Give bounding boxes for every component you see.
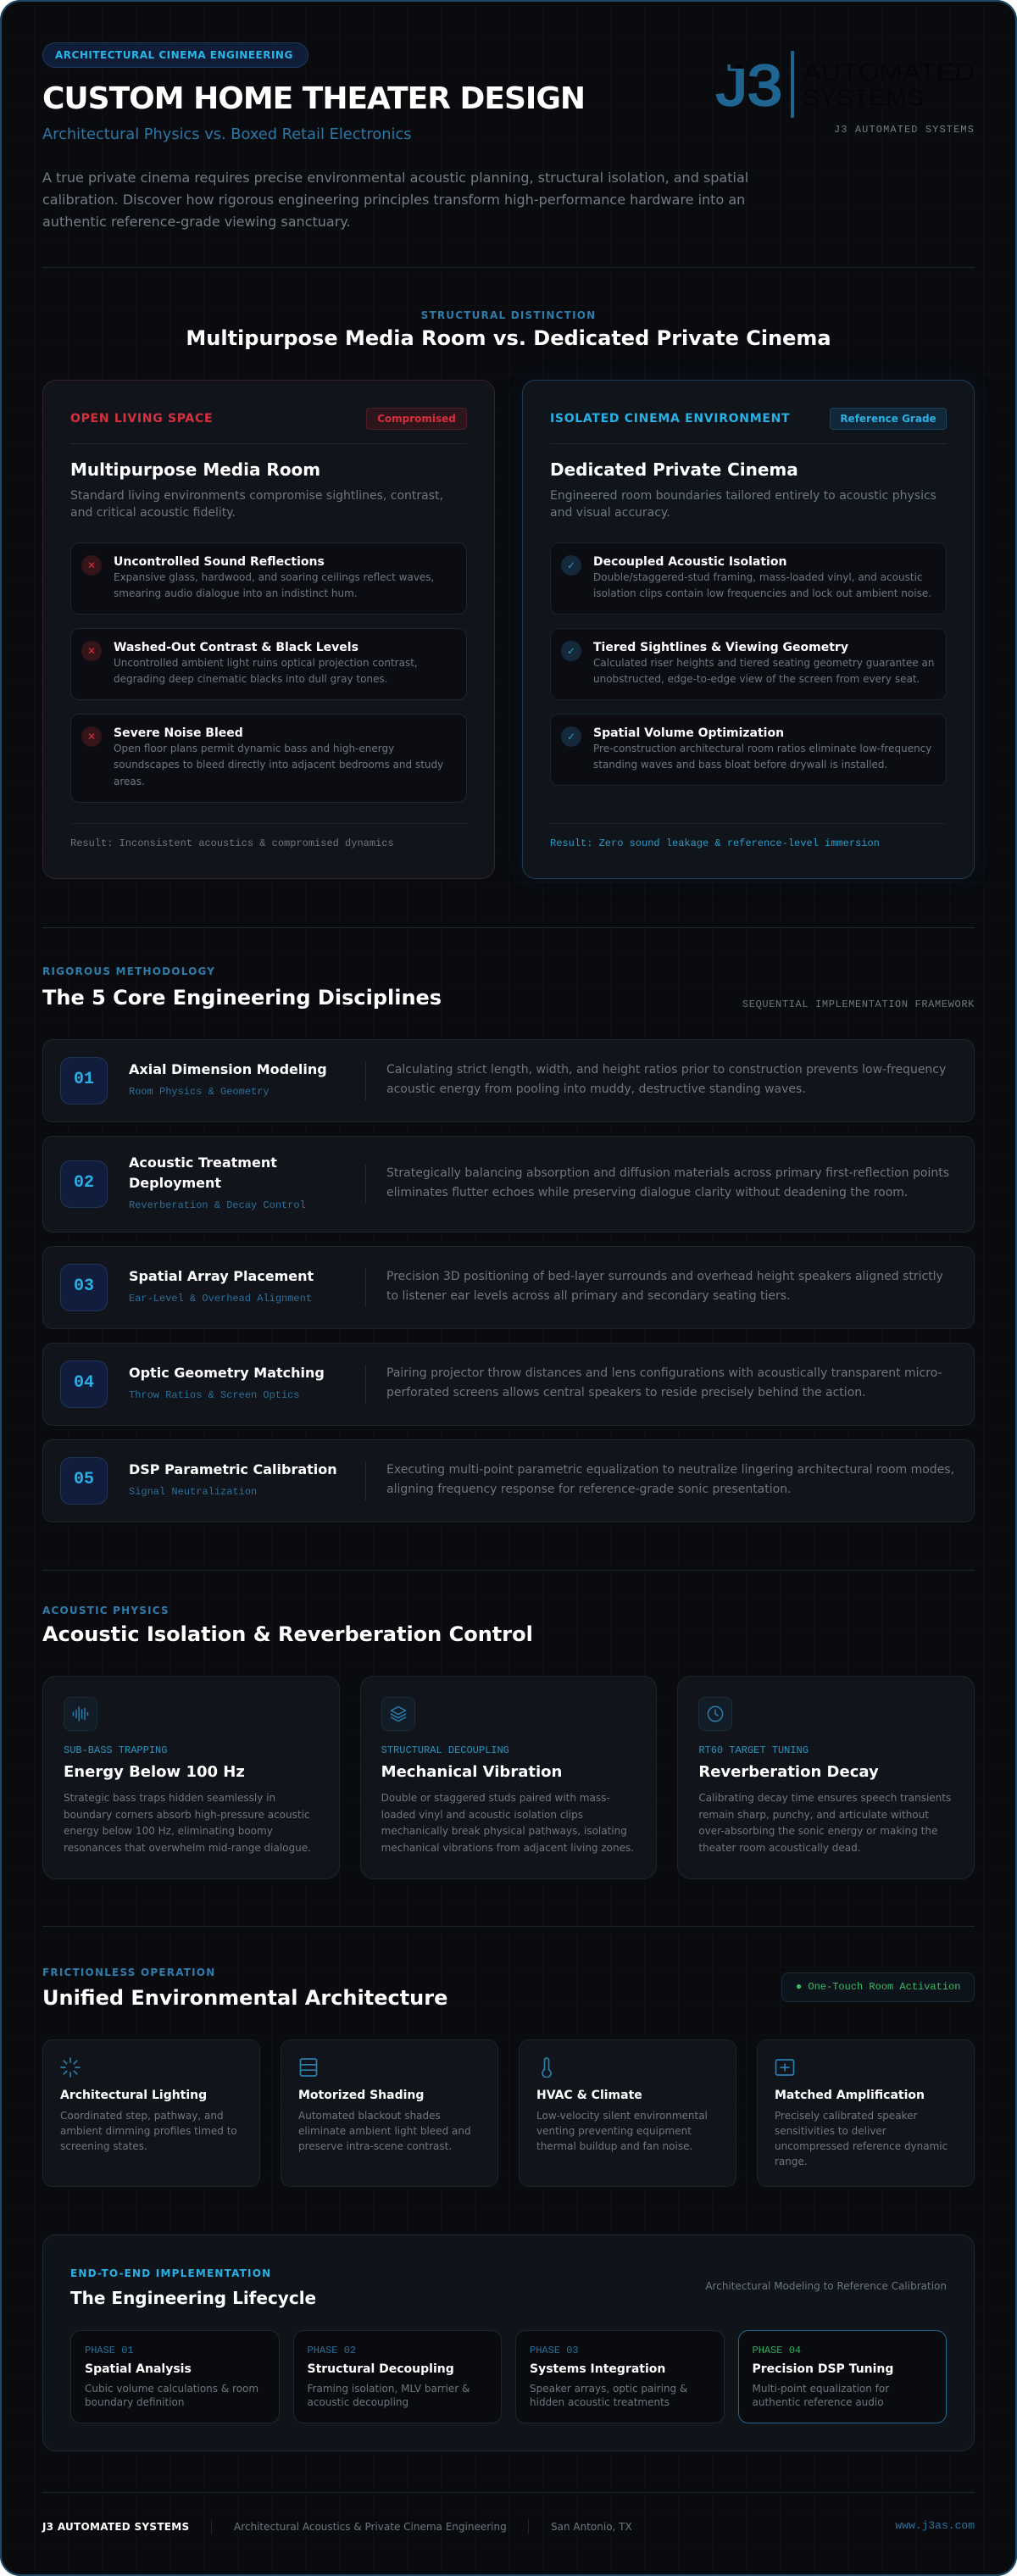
card: structural decoupling: mechanically break physical pathways, isolating: [381, 1825, 627, 1837]
eyebrow: frictionless operation: FRICTIONLESS OPERATION: [42, 1967, 215, 1978]
icon: check: [561, 641, 581, 661]
phase 03: Systems Integration: [530, 2362, 665, 2376]
number 03: 03: [74, 1277, 94, 1296]
icon: cross: [81, 641, 102, 661]
panel note: Architectural Modeling to Reference Calibration: [705, 2280, 947, 2292]
icon: check: ✓: [567, 731, 575, 743]
footer descriptor: Architectural Acoustics & Private Cinema Engineering: [234, 2521, 507, 2533]
footer location: San Antonio, TX: [551, 2521, 632, 2533]
row: discipline 02: Strategically balancing absorption and diffusion materials across primary first-reflection points: [386, 1166, 949, 1180]
row: discipline 02: eliminates flutter echoes while preserving dialogue clarity without deadening the room.: [386, 1185, 908, 1199]
card: sub-bass trapping: SUB-BASS TRAPPING: [64, 1744, 167, 1756]
logo: J3 Automated Systems: AUTOMATED: [803, 59, 975, 86]
logo caption: J3 AUTOMATED SYSTEMS: [834, 124, 975, 136]
number 01: 01: [74, 1070, 94, 1089]
eyebrow: acoustic physics: ACOUSTIC PHYSICS: [42, 1605, 170, 1616]
card: sub-bass trapping: Energy Below 100 Hz: [64, 1763, 245, 1781]
phase 02: acoustic decoupling: [307, 2396, 408, 2408]
panel: open living space: [42, 380, 495, 879]
item: washed-out contrast: Uncontrolled ambient light ruins optical projection contrast,: [114, 657, 418, 669]
row: discipline 03: Spatial Array Placement: [129, 1268, 314, 1284]
phase 01: boundary definition: [85, 2396, 184, 2408]
card: structural decoupling: mechanical vibrations from adjacent living zones.: [381, 1841, 634, 1853]
card: sub-bass trapping: resonances that overwhelm mid-range dialogue.: [64, 1841, 311, 1853]
row: discipline 03: to listener ear levels across all primary and secondary seating tiers.: [386, 1288, 791, 1302]
card: sub-bass trapping: energy below 100 Hz, eliminating boomy: [64, 1825, 273, 1837]
intro text: authentic reference-grade viewing sanctuary.: [42, 214, 351, 230]
item: washed-out contrast: [70, 628, 467, 700]
item: decoupled acoustic isolation: isolation clips contain low frequencies and lock out ambient noise.: [593, 587, 931, 599]
panel label: ISOLATED CINEMA ENVIRONMENT: [550, 412, 790, 426]
title: CUSTOM HOME THEATER DESIGN: [42, 81, 585, 116]
icon: layers: [381, 1697, 415, 1731]
row: discipline 01: Room Physics & Geometry: [129, 1086, 270, 1098]
heading: unified environmental architecture: Unified Environmental Architecture: [42, 1986, 447, 2010]
phase 01: Spatial Analysis: [85, 2362, 192, 2376]
item: spatial volume optimization: Spatial Volume Optimization: [593, 726, 784, 739]
icon: check: [561, 555, 581, 576]
intro text: [42, 170, 748, 230]
row: discipline 05: [42, 1439, 975, 1522]
item: tiered sightlines: [550, 628, 947, 700]
row: discipline 03: [42, 1246, 975, 1329]
number 02: 02: [74, 1173, 94, 1193]
number 05: 05: [74, 1470, 94, 1489]
intro text: A true private cinema requires precise environmental acoustic planning, structural isolation, and spatial: [42, 170, 748, 186]
row: discipline 01: [42, 1039, 975, 1122]
phase 02: PHASE 02: [307, 2345, 356, 2356]
card: matched amplification: Matched Amplification: [775, 2089, 925, 2102]
row: discipline 01: Calculating strict length, width, and height ratios prior to construction prevents low-frequency: [386, 1063, 946, 1077]
phase 04: Multi-point equalization for: [753, 2383, 889, 2395]
row: discipline 02: [42, 1136, 975, 1232]
panel: engineering lifecycle: [42, 2234, 975, 2451]
icon: cross: ✕: [87, 731, 96, 743]
row: discipline 04: Throw Ratios & Screen Optics: [129, 1389, 300, 1401]
phase 02: Framing isolation, MLV barrier &: [307, 2383, 470, 2395]
item: uncontrolled sound reflections: Expansive glass, hardwood, and soaring ceilings reflect waves,: [114, 571, 434, 583]
status chip: reference grade: Reference Grade: [840, 413, 936, 425]
item: uncontrolled sound reflections: Uncontrolled Sound Reflections: [114, 554, 325, 568]
icon: thermometer: [542, 2057, 552, 2078]
phase 04: PHASE 04: [753, 2345, 801, 2356]
logo: J3 Automated Systems: J3: [716, 53, 782, 118]
card: motorized shading: [281, 2039, 498, 2187]
card: matched amplification: Precisely calibrated speaker: [775, 2110, 917, 2122]
heading: 5 core disciplines: The 5 Core Engineering Disciplines: [42, 986, 442, 1010]
card: architectural lighting: Coordinated step, pathway, and: [60, 2110, 224, 2122]
result line: Result: Inconsistent acoustics & compromised dynamics: [70, 837, 394, 849]
item: severe noise bleed: [70, 714, 467, 803]
row: discipline 05: aligning frequency response for reference-grade sonic presentation.: [386, 1482, 792, 1495]
card: matched amplification: [757, 2039, 975, 2187]
card: motorized shading: preserve intra-scene contrast.: [298, 2140, 452, 2152]
card: motorized shading: Automated blackout shades: [298, 2110, 441, 2122]
panel description: [550, 489, 936, 520]
logo: J3 Automated Systems: SYSTEMS: [803, 85, 924, 110]
number 03: [60, 1264, 108, 1311]
phase 04: Precision DSP Tuning: [753, 2362, 893, 2376]
row: discipline 04: perforated screens allows central speakers to reside precisely behind the action.: [386, 1385, 866, 1399]
row: discipline 01: Axial Dimension Modeling: [129, 1061, 327, 1077]
row: discipline 05: Signal Neutralization: [129, 1486, 257, 1498]
card: structural decoupling: STRUCTURAL DECOUPLING: [381, 1744, 509, 1756]
phase 02: [293, 2330, 502, 2423]
card: hvac & climate: thermal buildup and fan noise.: [536, 2140, 692, 2152]
phase 03: Speaker arrays, optic pairing &: [530, 2383, 687, 2395]
row: discipline 03: Ear-Level & Overhead Alignment: [129, 1293, 312, 1305]
card: architectural lighting: [42, 2039, 260, 2187]
item: severe noise bleed: Open floor plans permit dynamic bass and high-energy: [114, 743, 394, 754]
card: hvac & climate: venting preventing equipment: [536, 2125, 692, 2137]
heading: acoustic isolation: Acoustic Isolation & Reverberation Control: [42, 1622, 533, 1646]
section heading: structural distinction: STRUCTURAL DISTINCTION: [421, 309, 596, 321]
panel heading: Dedicated Private Cinema: [550, 459, 798, 480]
row: discipline 03: Precision 3D positioning of bed-layer surrounds and overhead height speakers aligned strictly: [386, 1270, 943, 1283]
status chip: compromised: Compromised: [377, 413, 456, 425]
item: uncontrolled sound reflections: [70, 542, 467, 615]
card: architectural lighting: ambient dimming profiles timed to: [60, 2125, 237, 2137]
phase 03: PHASE 03: [530, 2345, 579, 2356]
card: structural decoupling: loaded vinyl and acoustic isolation clips: [381, 1809, 583, 1821]
item: severe noise bleed: Severe Noise Bleed: [114, 726, 243, 739]
card: rt60 target tuning: theater room acoustically dead.: [698, 1841, 861, 1853]
card: sub-bass trapping: [42, 1676, 340, 1879]
item: tiered sightlines: Calculated riser heights and tiered seating geometry guarantee an: [593, 657, 934, 669]
card: rt60 target tuning: over-absorbing the sonic energy or making the: [698, 1825, 937, 1837]
panel label: OPEN LIVING SPACE: [70, 412, 213, 426]
card: sub-bass trapping: Strategic bass traps hidden seamlessly in: [64, 1792, 275, 1804]
panel heading: The Engineering Lifecycle: [70, 2288, 316, 2308]
subtitle: Architectural Physics vs. Boxed Retail Electronics: [42, 125, 412, 143]
card: hvac & climate: [519, 2039, 736, 2187]
item: severe noise bleed: areas.: [114, 776, 145, 787]
panel heading: Multipurpose Media Room: [70, 459, 320, 480]
item: severe noise bleed: soundscapes to bleed directly into adjacent bedrooms and study: [114, 759, 443, 771]
card: structural decoupling: Mechanical Vibration: [381, 1763, 562, 1781]
icon: check: ✓: [567, 559, 575, 571]
card: motorized shading: eliminate ambient light bleed and: [298, 2125, 471, 2137]
card: rt60 target tuning: [677, 1676, 975, 1879]
result line: Result: Zero sound leakage & reference-level immersion: [550, 837, 880, 849]
footer brand: J3 AUTOMATED SYSTEMS: [42, 2521, 189, 2533]
number 04: [60, 1360, 108, 1408]
panel: isolated cinema environment: [522, 380, 975, 879]
row: discipline 02: Deployment: [129, 1175, 221, 1191]
eyebrow: END-TO-END IMPLEMENTATION: [70, 2267, 271, 2279]
card: rt60 target tuning: Calibrating decay time ensures speech transients: [698, 1792, 951, 1804]
item: decoupled acoustic isolation: Decoupled Acoustic Isolation: [593, 554, 786, 568]
row: discipline 02: Reverberation & Decay Control: [129, 1199, 306, 1211]
card: matched amplification: range.: [775, 2156, 808, 2167]
section heading: structural distinction: Multipurpose Media Room vs. Dedicated Private Cinema: [186, 326, 831, 350]
item: washed-out contrast: degrading deep cinematic blacks into dull gray tones.: [114, 673, 387, 685]
icon: lighting: [60, 2057, 81, 2078]
row: discipline 05: Executing multi-point parametric equalization to neutralize lingering architectural room modes,: [386, 1463, 954, 1477]
icon: cross: ✕: [87, 559, 96, 571]
panel description: [70, 489, 443, 520]
row: discipline 05: DSP Parametric Calibration: [129, 1461, 337, 1477]
section heading: structural distinction: [186, 309, 831, 350]
card: motorized shading: Motorized Shading: [298, 2089, 424, 2102]
phase 04: authentic reference audio: [753, 2396, 884, 2408]
icon: cross: [81, 555, 102, 576]
logo: J3 Automated Systems: [715, 51, 975, 118]
panel description: and visual accuracy.: [550, 506, 670, 520]
phase 01: Cubic volume calculations & room: [85, 2383, 258, 2395]
card: sub-bass trapping: boundary corners absorb high-pressure acoustic: [64, 1809, 310, 1821]
phase 01: PHASE 01: [85, 2345, 134, 2356]
card: structural decoupling: Double or staggered studs paired with mass-: [381, 1792, 610, 1804]
icon: cross: ✕: [87, 645, 96, 657]
icon: shades: [300, 2058, 317, 2077]
number 05: [60, 1457, 108, 1505]
icon: plus square: [775, 2059, 795, 2076]
card: matched amplification: sensitivities to deliver: [775, 2125, 886, 2137]
intro text: calibration. Discover how rigorous engineering principles transform high-performance hardware into an: [42, 192, 745, 208]
item: decoupled acoustic isolation: [550, 542, 947, 615]
row: discipline 01: acoustic energy from pooling into muddy, destructive standing waves.: [386, 1082, 806, 1095]
number 01: [60, 1057, 108, 1104]
badge: architectural cinema engineering: [42, 42, 308, 68]
card: rt60 target tuning: RT60 TARGET TUNING: [698, 1744, 809, 1756]
footer: [42, 2519, 975, 2534]
eyebrow: rigorous methodology: RIGOROUS METHODOLOGY: [42, 965, 215, 977]
row: discipline 04: Optic Geometry Matching: [129, 1365, 325, 1381]
item: uncontrolled sound reflections: smearing audio dialogue into an indistinct hum.: [114, 587, 358, 599]
card: architectural lighting: Architectural Lighting: [60, 2089, 207, 2102]
item: spatial volume optimization: standing waves and bass bloat before drywall is installed.: [593, 759, 887, 771]
item: tiered sightlines: unobstructed, edge-to-edge view of the screen from every seat.: [593, 673, 920, 685]
phase 03: hidden acoustic treatments: [530, 2396, 670, 2408]
card: rt60 target tuning: Reverberation Decay: [698, 1763, 879, 1781]
card: hvac & climate: HVAC & Climate: [536, 2089, 642, 2102]
phase 04: [737, 2330, 947, 2423]
status chip: compromised: [366, 408, 467, 430]
panel description: Standard living environments compromise sightlines, contrast,: [70, 489, 443, 503]
item: decoupled acoustic isolation: Double/staggered-stud framing, mass-loaded vinyl, and acoustic: [593, 571, 922, 583]
icon: waveform: [64, 1697, 97, 1731]
row: discipline 02: Acoustic Treatment: [129, 1154, 277, 1171]
item: washed-out contrast: Washed-Out Contrast & Black Levels: [114, 641, 358, 654]
icon: check: [561, 726, 581, 747]
card: rt60 target tuning: remain sharp, punchy, and articulate without: [698, 1809, 929, 1821]
item: spatial volume optimization: Pre-construction architectural room ratios eliminate low-frequency: [593, 743, 931, 754]
row: discipline 04: Pairing projector throw distances and lens configurations with acoustically transparent micro-: [386, 1366, 942, 1380]
status badge: one-touch room activation: [781, 1972, 975, 2002]
item: spatial volume optimization: [550, 714, 947, 786]
status chip: reference grade: [830, 408, 947, 430]
card: hvac & climate: Low-velocity silent environmental: [536, 2110, 708, 2122]
footer url: www.j3as.com: [895, 2519, 975, 2532]
icon: check: ✓: [567, 645, 575, 657]
icon: cross: [81, 726, 102, 747]
row: discipline 04: [42, 1343, 975, 1426]
status badge: one-touch room activation: ● One-Touch Room Activation: [796, 1981, 960, 1993]
phase 02: Structural Decoupling: [307, 2362, 454, 2376]
card: structural decoupling: [360, 1676, 657, 1879]
badge: architectural cinema engineering: ARCHITECTURAL CINEMA ENGINEERING: [55, 49, 293, 61]
phase 01: [70, 2330, 280, 2423]
panel description: and critical acoustic fidelity.: [70, 506, 236, 520]
icon: clock: [698, 1697, 732, 1731]
item: tiered sightlines: Tiered Sightlines & Viewing Geometry: [593, 641, 848, 654]
card: matched amplification: uncompressed reference dynamic: [775, 2140, 948, 2152]
framework note: SEQUENTIAL IMPLEMENTATION FRAMEWORK: [742, 999, 975, 1010]
phase 03: [515, 2330, 724, 2423]
number 04: 04: [74, 1373, 94, 1393]
panel description: Engineered room boundaries tailored entirely to acoustic physics: [550, 489, 936, 503]
number 02: [60, 1160, 108, 1208]
card: architectural lighting: screening states.: [60, 2140, 147, 2152]
